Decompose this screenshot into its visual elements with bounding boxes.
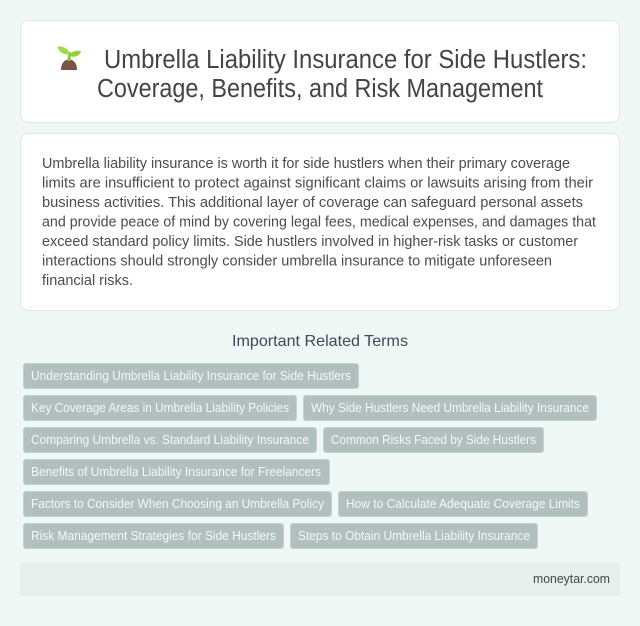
text block: summary paragraph: Umbrella liability insurance is worth it for side hustlers when their primary coverage bbox=[42, 156, 570, 172]
panel: title header bbox=[20, 20, 620, 122]
chip: understanding: Understanding Umbrella Liability Insurance for Side Hustlers bbox=[31, 369, 351, 383]
chip: steps: Steps to Obtain Umbrella Liability Insurance bbox=[298, 529, 530, 543]
chip: benefits: Benefits of Umbrella Liability Insurance for Freelancers bbox=[31, 465, 321, 479]
chips: related terms bbox=[24, 364, 596, 548]
text block: summary paragraph: interactions should strongly consider umbrella insurance to mitigate unforeseen bbox=[42, 254, 552, 270]
footer bbox=[20, 562, 620, 596]
chip: common risks bbox=[324, 428, 544, 452]
heading: related terms: Important Related Terms bbox=[232, 333, 408, 350]
chip: calculate bbox=[338, 492, 588, 516]
chip: factors bbox=[24, 492, 332, 516]
icon: seedling bbox=[58, 46, 81, 70]
text block: summary paragraph: financial risks. bbox=[42, 273, 133, 289]
text block: summary paragraph: business activities. This additional layer of coverage can safeguard personal assets bbox=[42, 195, 583, 211]
chip: factors: Factors to Consider When Choosing an Umbrella Policy bbox=[31, 497, 325, 511]
chip: key coverage bbox=[24, 396, 296, 420]
chip: calculate: How to Calculate Adequate Coverage Limits bbox=[346, 497, 580, 511]
text block: summary paragraph bbox=[42, 156, 596, 289]
text block: summary paragraph: limits are insufficient to protect against significant claims or lawsuits arising from their bbox=[42, 176, 593, 192]
panel: summary text bbox=[20, 134, 620, 310]
footer source: moneytar.com bbox=[533, 572, 610, 586]
chip: understanding bbox=[24, 364, 358, 388]
text block: summary paragraph: exceed standard policy limits. Side hustlers involved in higher-risk tasks or customer bbox=[42, 234, 578, 250]
title bbox=[97, 46, 587, 103]
chip: comparing: Comparing Umbrella vs. Standard Liability Insurance bbox=[31, 433, 309, 447]
text block: summary paragraph: and provide peace of mind by covering legal fees, medical expenses, and damages that bbox=[42, 214, 596, 230]
title: Coverage, Benefits, and Risk Management bbox=[97, 75, 543, 103]
chip: risk management: Risk Management Strategies for Side Hustlers bbox=[31, 529, 276, 543]
title: Umbrella Liability Insurance for Side Hustlers: bbox=[104, 46, 587, 74]
chip: why side hustlers bbox=[304, 396, 596, 420]
chip: risk management bbox=[24, 524, 284, 548]
chip: comparing bbox=[24, 428, 316, 452]
chip: benefits bbox=[24, 460, 330, 484]
chip: steps bbox=[290, 524, 538, 548]
chip: why side hustlers: Why Side Hustlers Need Umbrella Liability Insurance bbox=[311, 401, 589, 415]
chip: common risks: Common Risks Faced by Side Hustlers bbox=[331, 433, 536, 447]
chip: key coverage: Key Coverage Areas in Umbrella Liability Policies bbox=[31, 401, 289, 415]
